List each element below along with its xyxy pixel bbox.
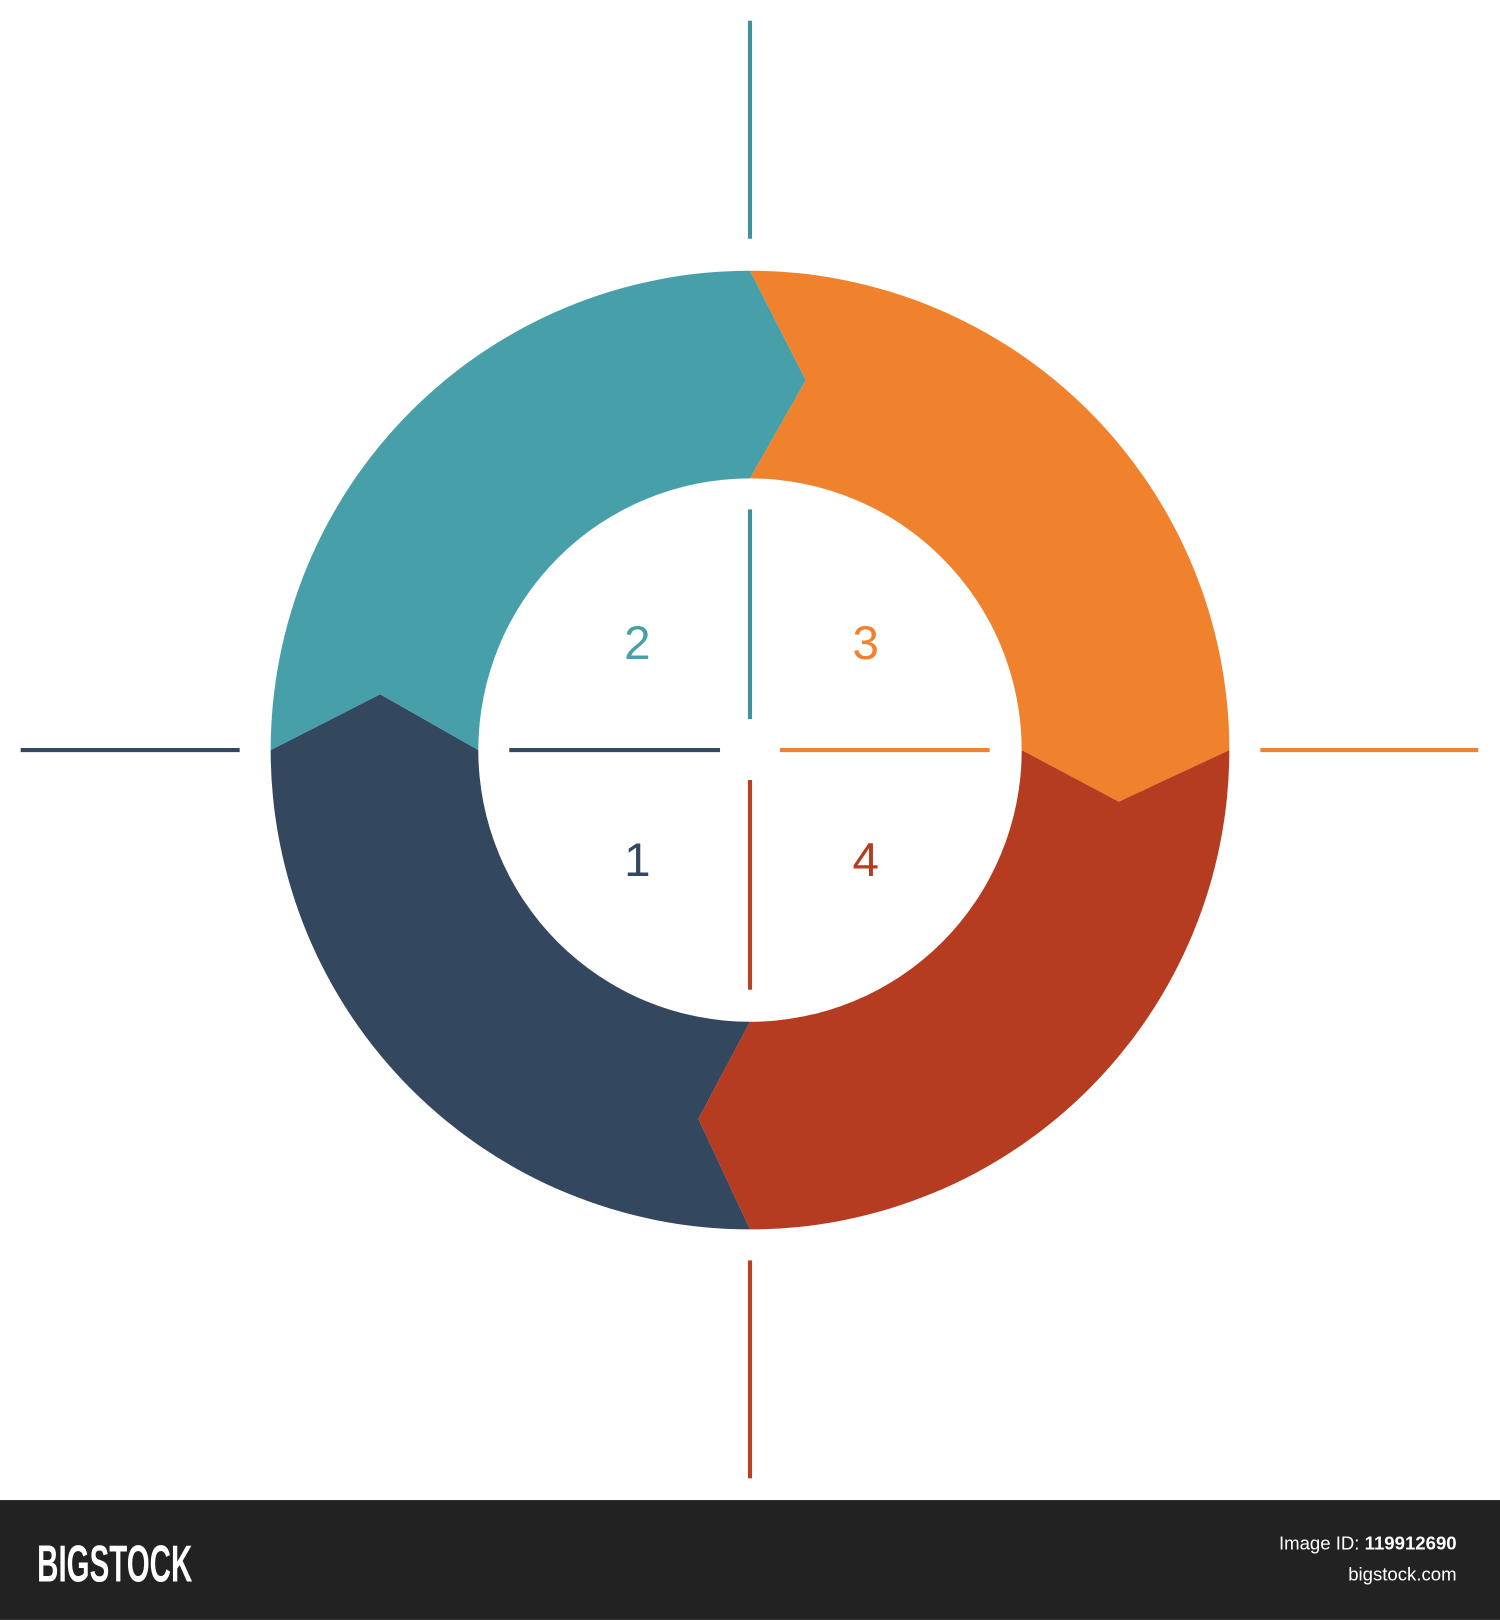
- number 3: 3: [852, 617, 879, 670]
- footer bar: [0, 1500, 1500, 1620]
- inner guide lines: [509, 509, 990, 990]
- line: right orange: [1260, 748, 1478, 752]
- line: left navy: [21, 748, 240, 752]
- segment 3: orange: [750, 271, 1229, 802]
- ring of four arrow segments: [271, 271, 1229, 1229]
- inner line: teal vertical: [748, 509, 752, 719]
- segment 1: navy: [271, 694, 750, 1229]
- step numbers: [624, 617, 879, 887]
- line: top teal: [748, 21, 752, 239]
- number 2: 2: [624, 617, 651, 670]
- inner line: red vertical: [748, 780, 752, 990]
- segment 4: red: [698, 750, 1229, 1229]
- number 1: 1: [624, 834, 651, 887]
- inner line: orange horizontal: [780, 748, 990, 752]
- footer site: bigstock.com: [1348, 1564, 1457, 1585]
- footer logo: BIGSTOCK: [37, 1535, 192, 1593]
- segment 2: teal: [271, 271, 806, 750]
- number 4: 4: [852, 834, 879, 887]
- inner line: navy horizontal: [509, 748, 720, 752]
- line: bottom red: [748, 1260, 752, 1478]
- footer image id: Image ID: 119912690: [1279, 1533, 1457, 1554]
